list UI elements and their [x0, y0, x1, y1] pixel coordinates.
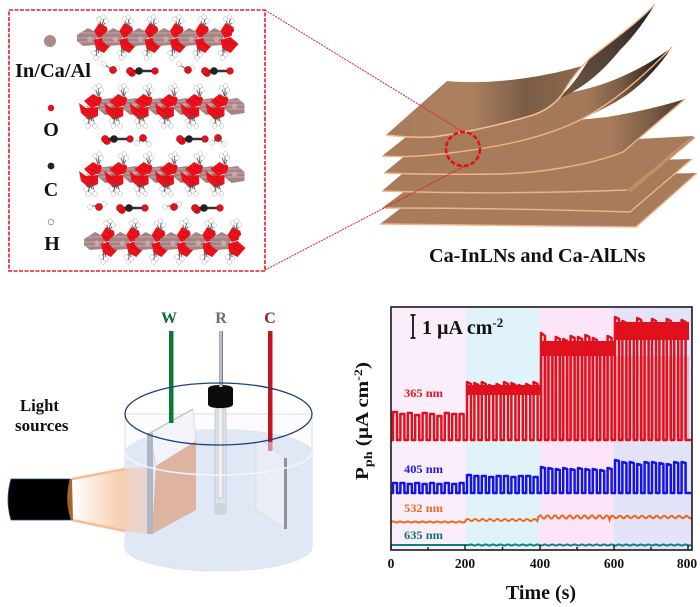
panel: photocurrent chart [351, 307, 697, 604]
crystal layer 1 [77, 15, 238, 60]
interlayer molecules row 1 [102, 62, 233, 77]
panel: stacked nanosheets illustration [380, 4, 697, 267]
635 nm trace [391, 544, 691, 546]
legend item: C: C [44, 179, 58, 201]
light beam [72, 467, 148, 534]
y axis title: ) [352, 362, 373, 369]
365 nm trace [391, 317, 691, 440]
sheet 4 [382, 136, 695, 193]
y axis title: -2 [351, 369, 365, 381]
light sources label: Light [20, 396, 59, 415]
reference electrode tube [215, 408, 226, 514]
sheet 2 [382, 47, 672, 157]
counter electrode plate [256, 436, 287, 529]
sheet 3 [384, 99, 685, 174]
electrode label W: W [161, 310, 177, 327]
interlayer molecules row 3 [88, 202, 223, 214]
legend item: O: O [43, 119, 59, 141]
sheet 1 [386, 58, 590, 137]
inset dashed frame [9, 10, 265, 271]
light sources label: sources [15, 416, 69, 435]
sheet 1 highlighted front edge [386, 4, 655, 137]
beaker glass body [125, 414, 312, 571]
sheet 1 curled underside [556, 4, 655, 100]
electrode label C: C [264, 310, 276, 327]
flashlight lens [67, 479, 73, 520]
legend item: H [44, 219, 60, 255]
sheet 6 (bottom) [380, 173, 697, 227]
electrolyte [125, 429, 312, 571]
sheet caption: Ca-InLNs and Ca-AlLNs [429, 245, 646, 267]
flashlight [8, 479, 71, 520]
x axis tick labels: 600 [604, 556, 624, 571]
y axis title: ph [361, 451, 375, 467]
working electrode plate [147, 409, 196, 534]
electrode label R: R [215, 310, 227, 327]
x axis tick labels: 800 [677, 556, 697, 571]
x axis title: Time (s) [506, 582, 576, 604]
scale bar: 1 µA cm [422, 317, 492, 339]
y axis title: P [352, 469, 372, 480]
sheet 5 [382, 159, 692, 212]
beam glow edges [72, 469, 125, 531]
legend item: In/Ca/Al [15, 35, 91, 82]
scale bar [410, 315, 503, 339]
label 405 nm: 405 nm [404, 462, 443, 476]
legend item: In/Ca/Al: In/Ca/Al [15, 60, 91, 82]
label 635 nm: 635 nm [404, 528, 443, 542]
crystal layer 3 [79, 152, 244, 196]
wavelength intervals background [391, 307, 692, 550]
reference electrode rod [219, 331, 223, 387]
legend: atom species [15, 35, 91, 255]
x axis tick labels: 400 [530, 556, 550, 571]
counter electrode wire [268, 331, 272, 451]
beaker rim [125, 383, 312, 445]
label 532 nm: 532 nm [404, 501, 443, 515]
light sources label [15, 396, 69, 435]
y axis title: (µA cm [352, 381, 373, 451]
crystal layer 4 [84, 219, 246, 264]
x axis tick labels: 0 [388, 556, 395, 571]
interlayer molecules row 2 [101, 134, 226, 146]
water meniscus [125, 452, 312, 475]
label 365 nm: 365 nm [404, 386, 443, 400]
legend item: H: H [44, 233, 60, 255]
405 nm trace [391, 460, 691, 493]
scale bar: -2 [492, 315, 503, 330]
zoom callout: dashed circle and leader lines [265, 10, 480, 270]
crystal layer 2 [79, 84, 244, 128]
x axis tick labels: 200 [455, 556, 475, 571]
x axis tick labels [388, 556, 697, 571]
panel: photoelectrochemical cell [8, 310, 312, 571]
532 nm trace [391, 516, 692, 522]
legend item: C [44, 163, 58, 201]
panel: crystal structure inset [9, 10, 265, 271]
reference electrode cap [208, 385, 233, 408]
plot frame and ticks [391, 307, 692, 550]
legend item: O [43, 105, 59, 141]
working electrode wire [169, 331, 174, 423]
